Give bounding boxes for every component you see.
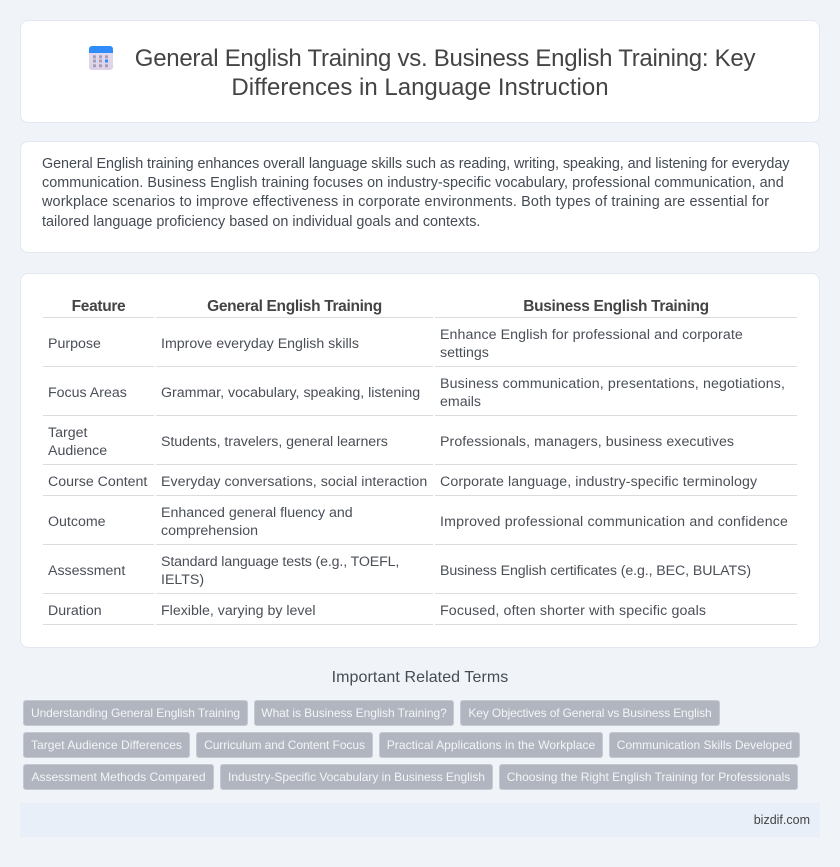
footer text: bizdif.com — [754, 813, 810, 827]
row: focus areas — [43, 376, 797, 416]
tag — [196, 732, 373, 758]
tag — [609, 732, 800, 758]
tag — [23, 732, 190, 758]
panel: introduction — [20, 141, 820, 253]
row: outcome: comprehension — [161, 523, 258, 539]
row: target audience: Professionals, managers, business executives — [440, 434, 734, 450]
row: outcome: Improved professional communication and confidence — [440, 514, 788, 530]
row: assessment: IELTS) — [161, 572, 204, 588]
icon: calendar — [89, 46, 113, 70]
text: Differences in Language Instruction — [231, 74, 609, 101]
row: purpose: settings — [440, 345, 489, 361]
row: assessment: Assessment — [48, 563, 125, 579]
row: outcome — [43, 505, 797, 545]
row: target audience: Students, travelers, general learners — [161, 434, 388, 450]
table header: General English Training — [207, 298, 382, 315]
tag — [23, 764, 214, 790]
tag — [220, 764, 493, 790]
text block: introduction: General English training enhances overall language skills such as reading, writing, speaking, and listening for everyday — [42, 156, 789, 172]
text: General English Training vs. Business English Training: Key — [135, 45, 755, 72]
row: course content: Course Content — [48, 474, 147, 490]
tags: related terms — [23, 700, 800, 790]
row: duration: Focused, often shorter with specific goals — [440, 603, 706, 619]
panel: comparison table — [20, 273, 820, 648]
tag: What is Business English Training? — [261, 706, 447, 720]
tag — [460, 700, 720, 726]
title — [135, 45, 756, 101]
tag — [499, 764, 798, 790]
row: focus areas: Business communication, presentations, negotiations, — [440, 376, 785, 392]
row: course content — [43, 474, 797, 496]
row: target audience — [43, 425, 797, 465]
row: focus areas: Focus Areas — [48, 385, 127, 401]
heading: important related terms: Important Related Terms — [332, 669, 508, 686]
tag — [23, 700, 248, 726]
row: outcome: Outcome — [48, 514, 106, 530]
tag: Choosing the Right English Training for Professionals — [507, 770, 790, 784]
row: course content: Everyday conversations, social interaction — [161, 474, 427, 490]
row: outcome: Enhanced general fluency and — [161, 505, 353, 521]
row: course content: Corporate language, industry-specific terminology — [440, 474, 757, 490]
tag: Target Audience Differences — [31, 738, 182, 752]
table header — [43, 298, 797, 318]
tag: Industry-Specific Vocabulary in Business English — [228, 770, 485, 784]
tag: Practical Applications in the Workplace — [387, 738, 595, 752]
tag: Understanding General English Training — [31, 706, 240, 720]
tag — [254, 700, 454, 726]
row: assessment — [43, 554, 797, 594]
tag: Assessment Methods Compared — [31, 770, 206, 784]
table header: Feature — [72, 298, 125, 315]
row: assessment: Business English certificates (e.g., BEC, BULATS) — [440, 563, 751, 579]
row: purpose: Improve everyday English skills — [161, 336, 359, 352]
text block: introduction: communication. Business English training focuses on industry-specific vocabulary, professional communication, and — [42, 174, 784, 190]
row: duration: Duration — [48, 603, 102, 619]
footer bar — [20, 803, 820, 837]
tag: Curriculum and Content Focus — [204, 738, 365, 752]
row: duration — [43, 603, 797, 625]
panel: title card — [20, 20, 820, 123]
text block: introduction: workplace scenarios to improve effectiveness in corporate environments. Both types of training are essential for — [42, 194, 769, 210]
row: focus areas: emails — [440, 394, 481, 410]
tag: Key Objectives of General vs Business English — [468, 706, 712, 720]
text block: introduction: tailored language proficiency based on individual goals and contexts. — [42, 214, 480, 230]
tag: Communication Skills Developed — [617, 738, 792, 752]
row: focus areas: Grammar, vocabulary, speaking, listening — [161, 385, 420, 401]
row: target audience: Audience — [48, 443, 107, 459]
text block: introduction — [42, 156, 790, 230]
row: assessment: Standard language tests (e.g., TOEFL, — [161, 554, 399, 570]
table header: Business English Training — [523, 298, 709, 315]
row: purpose — [43, 327, 797, 367]
tag — [379, 732, 603, 758]
row: duration: Flexible, varying by level — [161, 603, 316, 619]
comparison table — [43, 298, 797, 625]
row: target audience: Target — [48, 425, 87, 441]
row: purpose: Enhance English for professional and corporate — [440, 327, 743, 343]
row: purpose: Purpose — [48, 336, 101, 352]
